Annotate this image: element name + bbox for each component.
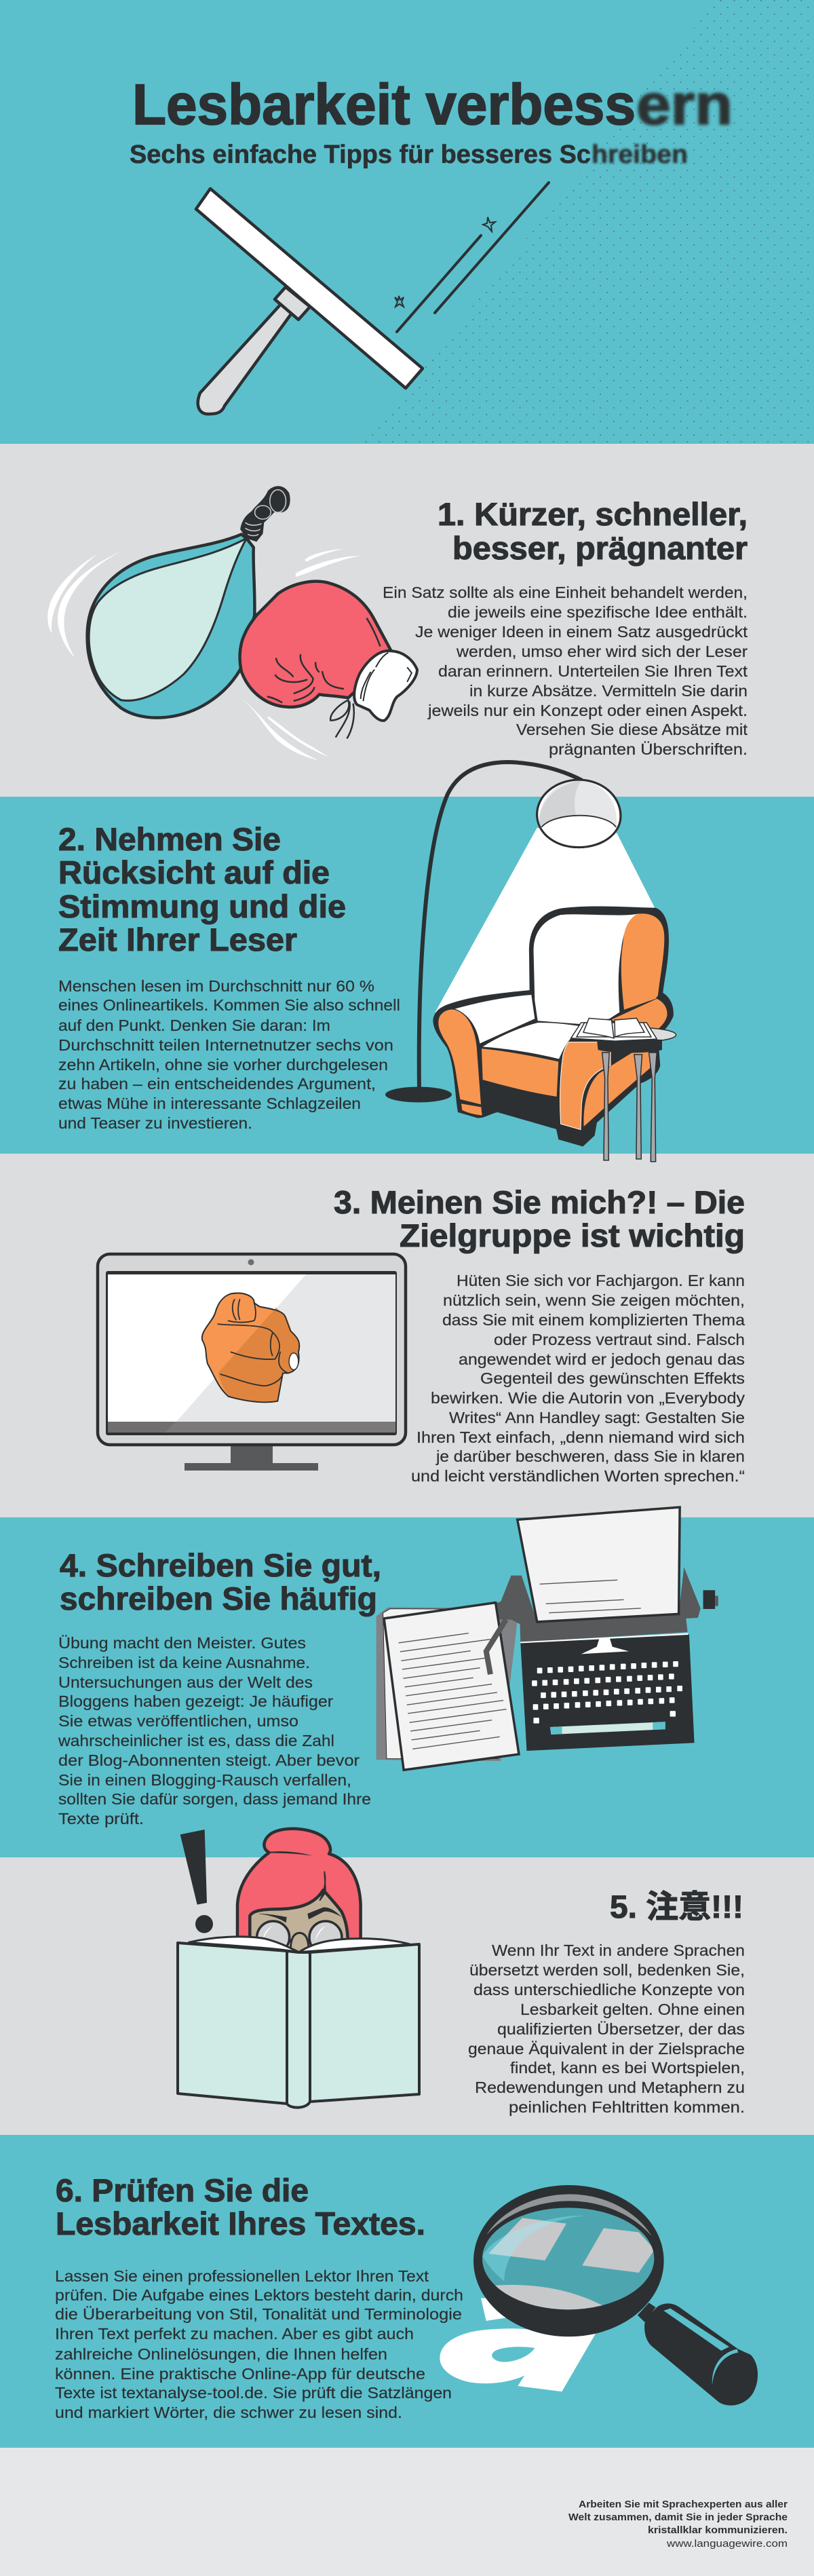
heading 3 — [334, 1184, 745, 1253]
body 6: und markiert Wörter, die schwer zu lesen sind. — [55, 2404, 402, 2421]
lamp shade — [537, 780, 621, 848]
body 6 — [55, 2267, 463, 2421]
section 3 text — [334, 1184, 745, 1485]
body 1: werden, umso eher wird sich der Leser — [456, 643, 748, 660]
body 6: können. Eine praktische Online-App für deutsche — [55, 2365, 425, 2383]
book pages — [189, 1937, 299, 1952]
section 2 text — [58, 821, 400, 1132]
body 2: Menschen lesen im Durchschnitt nur 60 % — [58, 977, 374, 995]
body 1: prägnanten Überschriften. — [549, 740, 748, 758]
dot pattern — [363, 0, 814, 444]
body 5: Wenn Ihr Text in andere Sprachen — [492, 1942, 745, 1959]
title: Lesbarkeit verbess — [132, 73, 636, 136]
heading 2 — [58, 821, 346, 958]
body 4: wahrscheinlicher ist es, dass die Zahl — [58, 1732, 334, 1749]
body 6: Ihren Text perfekt zu machen. Aber es gibt auch — [55, 2325, 414, 2343]
keys — [532, 1661, 682, 1724]
body 1: Je weniger Ideen in einem Satz ausgedrückt — [415, 623, 748, 641]
icon: swipe lines and sparkles — [395, 183, 549, 332]
body 3: angewendet wird er jedoch genau das — [459, 1350, 745, 1368]
body 5: übersetzt werden soll, bedenken Sie, — [469, 1961, 745, 1979]
heading 5: 5. 注意!!! — [610, 1889, 743, 1925]
body 1: daran erinnern. Unterteilen Sie Ihren Text — [438, 662, 748, 680]
glove cuff — [354, 651, 417, 721]
section 6 text — [55, 2172, 463, 2421]
body 4: Untersuchungen aus der Welt des — [58, 1673, 313, 1691]
body 4: Übung macht den Meister. Gutes — [58, 1634, 306, 1652]
body 1 — [383, 584, 748, 758]
title: ern — [636, 73, 733, 136]
subtitle: hreiben — [592, 140, 688, 169]
body 1: jeweils nur ein Konzept oder einen Aspekt. — [427, 702, 748, 719]
icon: squeegee — [196, 189, 423, 414]
body 4: Sie in einen Blogging-Rausch verfallen, — [58, 1771, 351, 1789]
panel: section 6 background — [0, 2135, 814, 2448]
body 4 — [58, 1634, 371, 1827]
icon: pointing hand — [202, 1293, 299, 1402]
back sheet in typewriter — [518, 1507, 680, 1622]
body 3: je darüber beschweren, dass Sie in klaren — [435, 1447, 745, 1465]
body 4: sollten Sie dafür sorgen, dass jemand Ihre — [58, 1790, 371, 1808]
icon: typewriter and pages — [376, 1507, 718, 1770]
heading 3: 3. Meinen Sie mich?! – Die — [334, 1184, 745, 1220]
bag — [88, 534, 254, 718]
body 4: der Blog-Abonnenten steigt. Aber bevor — [58, 1751, 360, 1769]
panel: footer background — [0, 2448, 814, 2576]
body 6: prüfen. Die Aufgabe eines Lektors besteht darin, durch — [55, 2286, 463, 2304]
body 3: dass Sie mit einem komplizierten Thema — [442, 1311, 745, 1329]
glove — [240, 582, 391, 707]
heading 6 — [56, 2172, 425, 2241]
section 1 text — [383, 496, 748, 758]
body 5: Redewendungen und Metaphern zu — [475, 2079, 745, 2096]
body 5: findet, kann es bei Wortspielen, — [510, 2059, 745, 2077]
body 5: dass unterschiedliche Konzepte von — [473, 1981, 745, 1999]
body 1: die jeweils eine spezifische Idee enthält. — [448, 603, 748, 621]
heading 2: Rücksicht auf die — [58, 854, 330, 890]
heading 2: 2. Nehmen Sie — [58, 821, 281, 857]
section 5 text — [468, 1889, 745, 2116]
body 6: Texte ist textanalyse-tool.de. Sie prüft die Satzlängen — [55, 2384, 452, 2402]
panel: section 1 background — [0, 444, 814, 797]
side table — [595, 1027, 676, 1042]
heading 1 — [438, 496, 748, 566]
body 3 — [411, 1272, 745, 1485]
body 3: Hüten Sie sich vor Fachjargon. Er kann — [457, 1272, 745, 1289]
body 2: Durchschnitt teilen Internetnutzer sechs von — [58, 1036, 393, 1054]
glove fingers — [268, 619, 380, 702]
body 2 — [58, 977, 400, 1132]
footer text — [568, 2499, 788, 2550]
footer text: Arbeiten Sie mit Sprachexperten aus aller — [579, 2499, 788, 2510]
panel: section 2 background — [0, 797, 814, 1154]
body 4: Schreiben ist da keine Ausnahme. — [58, 1654, 310, 1671]
panel: section 3 background — [0, 1154, 814, 1517]
body 2: zehn Artikeln, ohne sie vorher durchgelesen — [58, 1056, 388, 1074]
icon: punching bag and boxing glove — [47, 486, 417, 761]
heading 2: Zeit Ihrer Leser — [58, 922, 297, 958]
body 2: eines Onlineartikels. Kommen Sie also schnell — [58, 996, 400, 1014]
heading 6: Lesbarkeit Ihres Textes. — [56, 2205, 425, 2241]
paper stack — [376, 1607, 519, 1761]
icon: armchair, lamp shade and side table — [433, 780, 676, 1162]
body 6: die Überarbeitung von Stil, Tonalität und Terminologie — [55, 2305, 462, 2323]
body 1: in kurze Absätze. Vermitteln Sie darin — [469, 682, 748, 700]
body 5: peinlichen Fehltritten kommen. — [509, 2098, 745, 2116]
heading 1: 1. Kürzer, schneller, — [438, 496, 748, 532]
body 1: Versehen Sie diese Absätze mit — [516, 721, 748, 738]
body 2: und Teaser zu investieren. — [58, 1114, 252, 1132]
body 5 — [468, 1942, 745, 2116]
bag rope and ring — [240, 486, 290, 542]
hair — [237, 1829, 361, 1941]
letter a — [440, 2298, 596, 2391]
glasses — [257, 1921, 290, 1954]
body 5: Lesbarkeit gelten. Ohne einen — [520, 2001, 745, 2018]
body 4: Bloggens haben gezeigt: Je häufiger — [58, 1692, 333, 1710]
icon: open book cover — [178, 1943, 419, 2108]
heading 2: Stimmung und die — [58, 888, 346, 924]
glove strings — [330, 700, 354, 738]
heading 1: besser, prägnanter — [452, 530, 748, 566]
handle — [638, 2303, 656, 2322]
body 3: Writes“ Ann Handley sagt: Gestalten Sie — [449, 1409, 745, 1426]
armchair — [433, 906, 674, 1147]
front sheet — [384, 1603, 519, 1770]
body 4: Texte prüft. — [58, 1810, 144, 1827]
body 2: etwas Mühe in interessante Schlagzeilen — [58, 1095, 361, 1112]
space bar — [550, 1722, 665, 1735]
panel: header background — [0, 0, 814, 444]
body 3: oder Prozess vertraut sind. Falsch — [494, 1331, 745, 1348]
eyebrows — [258, 1914, 287, 1922]
rim — [473, 2185, 664, 2336]
keyboard — [520, 1634, 695, 1751]
icon: exclamation mark — [180, 1830, 213, 1933]
footer text: www.languagewire.com — [666, 2538, 788, 2550]
body 3: Gegenteil des gewünschten Effekts — [480, 1369, 745, 1387]
icon: floor lamp pole — [385, 762, 582, 1102]
lens — [482, 2208, 654, 2309]
icon: magnifying glass over letter a — [440, 2185, 758, 2406]
subtitle: Sechs einfache Tipps für besseres Sc — [130, 140, 591, 169]
body 3: nützlich sein, wenn Sie zeigen möchten, — [443, 1291, 745, 1309]
icon: computer monitor — [98, 1254, 406, 1471]
panel: section 5 background — [0, 1857, 814, 2135]
footer text: kristallklar kommunizieren. — [648, 2524, 788, 2536]
panel: section 4 background — [0, 1517, 814, 1857]
body 2: zu haben – ein entscheidendes Argument, — [58, 1075, 376, 1093]
body 3: und leicht verständlichen Worten sprechen.“ — [411, 1467, 745, 1485]
footer text: Welt zusammen, damit Sie in jeder Sprache — [568, 2512, 788, 2523]
body 6: Lassen Sie einen professionellen Lektor Ihren Text — [55, 2267, 429, 2285]
body 5: qualifizierten Übersetzer, der das — [497, 2020, 745, 2038]
body 5: genaue Äquivalent in der Zielsprache — [468, 2040, 745, 2058]
body 4: Sie etwas veröffentlichen, umso — [58, 1712, 298, 1730]
heading 3: Zielgruppe ist wichtig — [400, 1217, 745, 1253]
body 2: auf den Punkt. Denken Sie daran: Im — [58, 1017, 330, 1034]
typewriter body — [484, 1567, 701, 1642]
icon: woman reading — [189, 1829, 410, 1954]
heading 6: 6. Prüfen Sie die — [56, 2172, 309, 2208]
type arm — [486, 1620, 506, 1674]
body 3: bewirken. Wie die Autorin von „Everybody — [431, 1389, 745, 1407]
body 6: zahlreiche Onlinelösungen, die Ihnen helfen — [55, 2345, 387, 2363]
whoosh marks — [47, 548, 361, 761]
book on table — [571, 1018, 657, 1041]
light cone — [435, 828, 656, 1053]
heading 4 — [60, 1547, 381, 1616]
face — [250, 1890, 348, 1941]
section 4 text — [58, 1547, 381, 1827]
body 3: Ihren Text einfach, „denn niemand wird sich — [416, 1428, 745, 1446]
heading 4: 4. Schreiben Sie gut, — [60, 1547, 381, 1583]
body 1: Ein Satz sollte als eine Einheit behandelt werden, — [383, 584, 748, 601]
heading 4: schreiben Sie häufig — [60, 1580, 377, 1616]
